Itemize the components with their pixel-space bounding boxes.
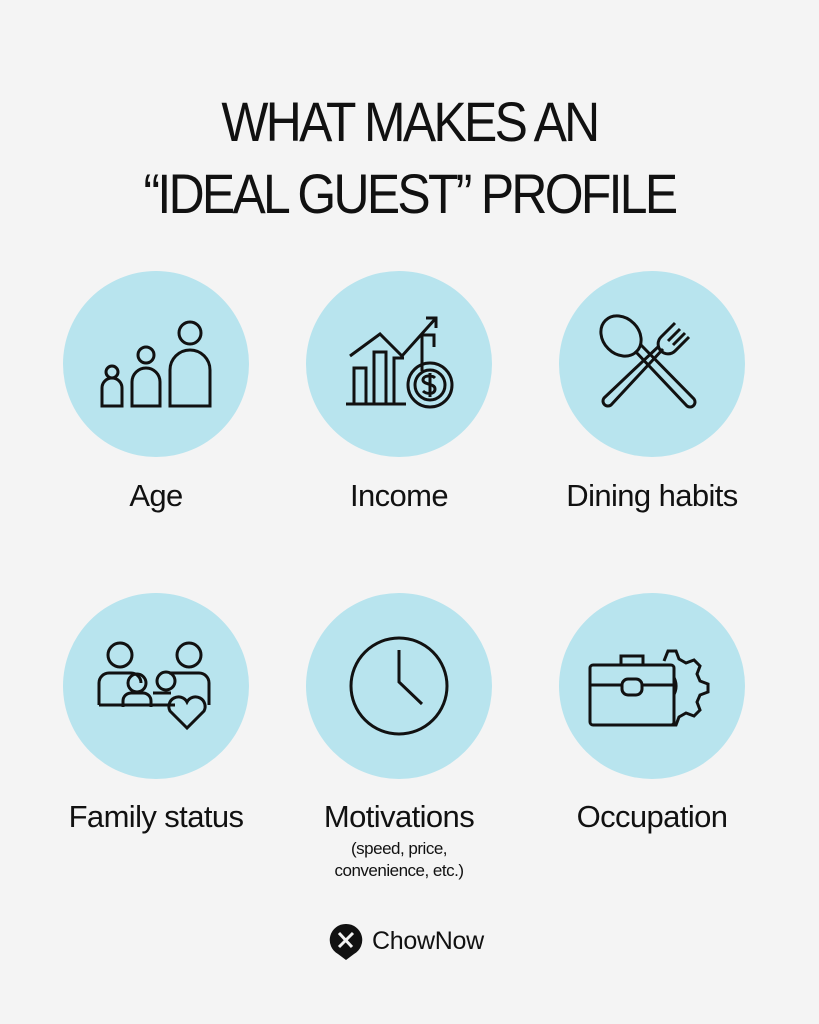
panel: family status xyxy=(63,593,249,779)
panel: age xyxy=(63,271,249,457)
label: family status: Family status xyxy=(69,799,243,834)
label: age: Age xyxy=(129,478,183,513)
title: WHAT MAKES AN xyxy=(221,90,597,153)
title xyxy=(143,90,676,225)
logo: ChowNow xyxy=(372,927,484,955)
label: dining habits: Dining habits xyxy=(566,478,738,513)
logo xyxy=(330,924,484,960)
label: income: Income xyxy=(350,478,448,513)
panel: motivations xyxy=(306,593,492,779)
subtext: motivations: convenience, etc.) xyxy=(335,861,463,880)
label: motivations: Motivations xyxy=(324,799,474,834)
subtext: motivations xyxy=(335,839,463,880)
panel: occupation xyxy=(559,593,745,779)
subtext: motivations: (speed, price, xyxy=(351,839,447,858)
title: “IDEAL GUEST” PROFILE xyxy=(143,162,675,225)
panel: dining habits xyxy=(559,271,745,457)
panel: income xyxy=(306,271,492,457)
label: occupation: Occupation xyxy=(577,799,727,834)
